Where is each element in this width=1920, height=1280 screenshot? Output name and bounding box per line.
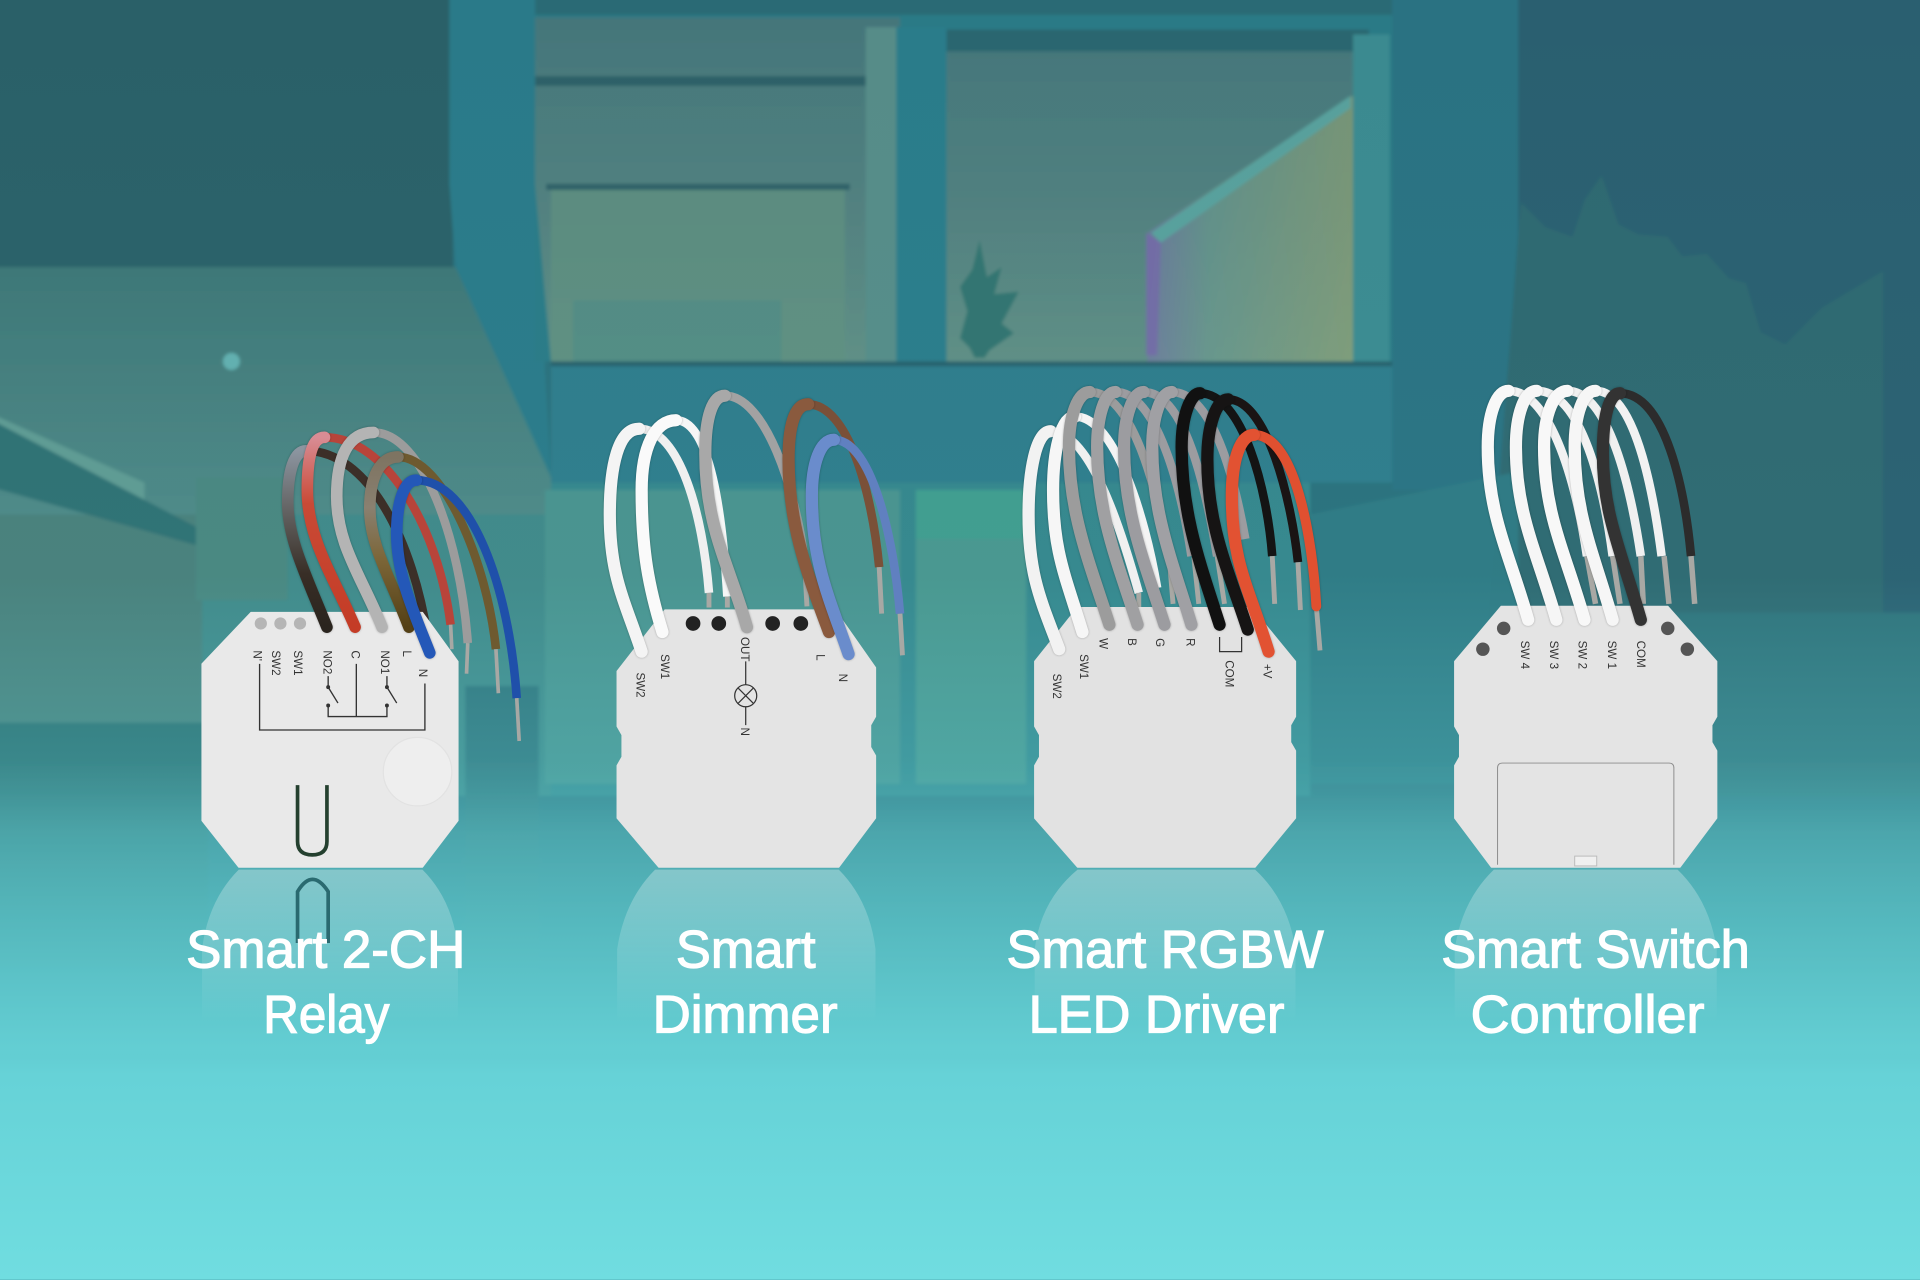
wiring labels: SW2 (634, 672, 647, 698)
wiring labels: COM (1223, 660, 1236, 687)
wiring labels: N' (250, 650, 263, 661)
label: Smart Dimmer: Smart (676, 921, 816, 980)
wire tips (1587, 556, 1695, 604)
reflections under the modules (202, 870, 1717, 1023)
lamp symbol (735, 661, 757, 725)
wiring labels (1518, 641, 1647, 670)
module body (1035, 608, 1296, 867)
wiring labels: NO2 (320, 650, 333, 674)
module: Smart Dimmer (610, 396, 902, 867)
label: Smart Switch Controller: Smart Switch (1441, 921, 1750, 980)
wires, back halves (1509, 391, 1691, 556)
wiring labels: OUT (738, 637, 751, 661)
wire tips (709, 560, 902, 655)
wiring labels: N (836, 674, 849, 682)
terminal holes (686, 616, 808, 631)
screw holes (1476, 622, 1694, 656)
terminal holes (255, 617, 306, 630)
label: Smart RGBW LED Driver: Smart RGBW (1007, 921, 1324, 980)
wiring labels: SW 4 (1518, 641, 1531, 670)
wiring labels: L (814, 654, 827, 661)
label: Smart Dimmer: Dimmer (653, 985, 838, 1044)
module body (1455, 606, 1717, 867)
wiring labels: L (400, 650, 413, 657)
wiring labels (1050, 638, 1274, 699)
antenna (298, 785, 327, 855)
module body (202, 612, 458, 867)
wire tips (1139, 556, 1320, 650)
wiring labels: SW 3 (1547, 641, 1560, 669)
wiring labels: SW1 (658, 654, 671, 679)
wiring labels: NO1 (378, 650, 391, 674)
button (383, 737, 452, 806)
wires, back halves (306, 432, 517, 698)
wiring labels: SW2 (1050, 674, 1063, 699)
module: Smart 2-CH Relay (202, 432, 519, 867)
COM bracket (1220, 637, 1242, 652)
wiring labels: +V (1261, 664, 1274, 679)
wiring labels: C (348, 650, 361, 659)
label: Smart Switch Controller: Controller (1471, 985, 1704, 1044)
wiring labels: COM (1634, 641, 1647, 668)
label: Smart 2-CH Relay (186, 921, 465, 1044)
label: Smart Dimmer (653, 921, 838, 1044)
wiring diagram (260, 664, 425, 730)
wiring labels: B (1125, 638, 1138, 646)
wiring labels: R (1184, 638, 1197, 647)
wires, front halves (610, 396, 849, 654)
wires, front halves (1488, 391, 1641, 620)
wiring labels: SW2 (269, 650, 282, 676)
battery cover (1498, 763, 1674, 866)
wires, front halves (288, 432, 430, 653)
wiring labels: W (1097, 638, 1110, 649)
label: Smart 2-CH Relay: Smart 2-CH (186, 921, 465, 980)
label: Smart Switch Controller (1441, 921, 1750, 1044)
wiring labels: SW 1 (1605, 641, 1618, 669)
wires, back halves (1051, 392, 1298, 593)
wiring labels: SW1 (291, 650, 304, 676)
wires, front halves (1029, 392, 1316, 652)
label: Smart 2-CH Relay: Relay (263, 985, 390, 1044)
wiring labels (634, 637, 849, 736)
module: Smart RGBW LED Driver (1029, 392, 1320, 867)
wires, back halves (639, 396, 900, 614)
label: Smart RGBW LED Driver: LED Driver (1029, 985, 1284, 1044)
wiring labels: SW1 (1077, 654, 1090, 679)
wire tips (451, 625, 519, 741)
wiring labels: N (738, 728, 751, 736)
wiring labels: G (1153, 638, 1166, 647)
wiring labels (250, 650, 429, 677)
module body (617, 610, 876, 867)
label: Smart RGBW LED Driver (1007, 921, 1324, 1044)
wiring labels: N (416, 669, 429, 677)
module: Smart Switch Controller (1455, 391, 1717, 867)
wiring labels: SW 2 (1575, 641, 1588, 669)
